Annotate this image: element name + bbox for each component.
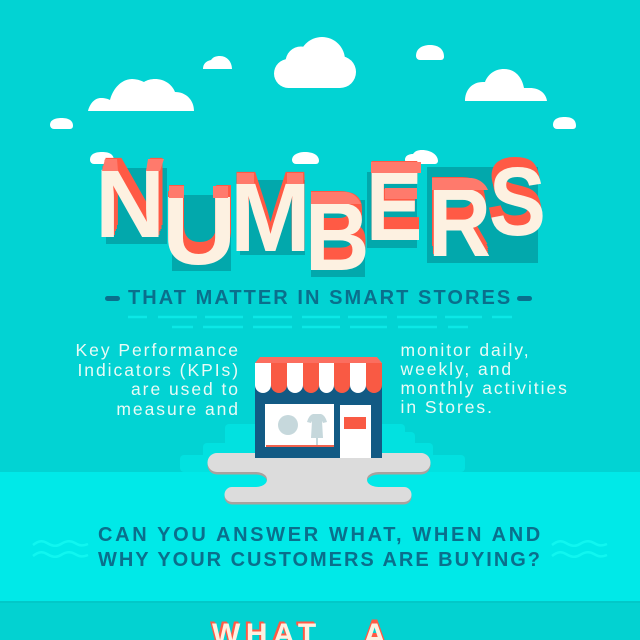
- store door: [340, 405, 371, 458]
- letter N: N: [95, 149, 165, 258]
- letter E: E: [366, 152, 422, 261]
- letter M: M: [230, 163, 311, 272]
- store window: [265, 404, 334, 447]
- dash left: [105, 296, 120, 301]
- wave icon right: [552, 541, 607, 557]
- cloud: small 1: [203, 56, 232, 69]
- intro text right: monitor daily,: [400, 340, 531, 360]
- letter S: S: [489, 147, 546, 256]
- platform shadow: [208, 456, 430, 504]
- intro text right: monthly activities: [400, 378, 569, 398]
- subtitle text: THAT MATTER IN SMART STORES: [128, 287, 512, 309]
- intro text right: in Stores.: [400, 397, 494, 417]
- lighter top faces of the letters: [102, 159, 488, 204]
- cloud: small 4: [553, 117, 576, 129]
- stepped water shapes behind store: [180, 424, 465, 472]
- dash right: [517, 296, 532, 301]
- cloud: small 7: [405, 150, 438, 164]
- cloud: small 6: [292, 152, 319, 164]
- question heading: WHY YOUR CUSTOMERS ARE BUYING?: [98, 549, 542, 571]
- intro text right: [400, 340, 569, 417]
- intro text right: weekly, and: [400, 359, 513, 379]
- letter U: U: [162, 176, 236, 285]
- subtitle: [105, 287, 532, 309]
- letter R: R: [428, 168, 491, 277]
- store body: [255, 385, 382, 458]
- store awning: [255, 357, 382, 393]
- intro text left: are used to: [131, 379, 240, 399]
- cloud: small 2: [416, 45, 444, 60]
- wave icon left: [33, 541, 88, 557]
- intro text left: Key Performance: [76, 340, 240, 360]
- cloud: large left: [88, 79, 194, 111]
- letter shadow panels: [106, 167, 538, 277]
- cloud: large center: [274, 37, 356, 88]
- platform: [208, 453, 430, 502]
- intro text left: Indicators (KPIs): [78, 360, 240, 380]
- question heading: CAN YOU ANSWER WHAT, WHEN AND: [98, 524, 543, 546]
- lower section band: [0, 601, 640, 640]
- cloud: small 3: [50, 118, 73, 129]
- letter B: B: [305, 182, 369, 291]
- cloud: small 5: [90, 152, 114, 164]
- cloud: right: [465, 69, 547, 101]
- icon: shirt on mannequin: [307, 414, 327, 445]
- question heading: [98, 524, 543, 571]
- ground band: [0, 472, 640, 602]
- intro text left: [76, 340, 240, 418]
- icon: display circle: [278, 415, 298, 435]
- title: NUMBERS: [95, 147, 546, 291]
- intro text left: measure and: [116, 398, 240, 418]
